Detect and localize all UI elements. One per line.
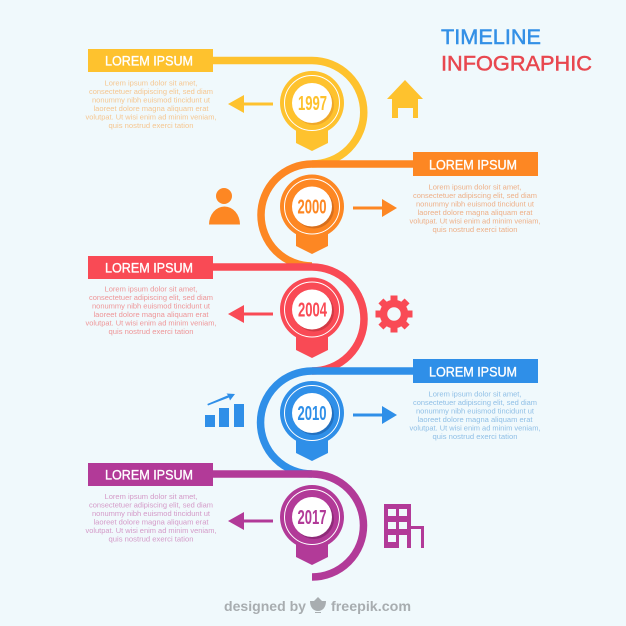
year badge [280,71,344,151]
text block: Lorem ipsum dolor sit amet, [104,284,198,294]
arrow [228,512,273,530]
icon: person [209,188,240,224]
title: INFOGRAPHIC [441,52,592,76]
heading bar [413,359,538,383]
text block: nonummy nibh euismod tincidunt ut [416,200,534,208]
icon: buildings [384,504,424,548]
heading bar [88,49,213,72]
year badge: 2010 [298,403,326,425]
text block: consectetuer adipiscing elit, sed diam [89,87,213,96]
footer credit [224,597,411,614]
panel: 2010 [205,359,540,461]
year badge [280,381,344,461]
text block: laoreet dolore magna aliquam erat [94,518,208,526]
timeline connector: blue [261,371,413,474]
timeline connector: red [213,267,364,371]
heading bar: LOREM IPSUM [429,364,517,380]
text block: laoreet dolore magna aliquam erat [418,415,532,424]
text block: nonummy nibh euismod tincidunt ut [92,509,210,518]
text block: volutpat. Ut wisi enim ad minim veniam, [410,216,540,226]
text block: Lorem ipsum dolor sit amet, [428,182,522,192]
text block: quis nostrud exerci tation [108,327,194,336]
text block [86,284,216,336]
footer credit: designed by [224,598,306,614]
year badge: 2004 [298,300,328,322]
arrow [228,305,273,323]
title: TIMELINE [441,25,541,49]
text block: nonummy nibh euismod tincidunt ut [416,406,534,416]
text block [410,182,540,234]
text block: volutpat. Ut wisi enim ad minim veniam, [86,318,216,328]
text block: Lorem ipsum dolor sit amet, [428,390,522,398]
year badge [280,278,344,358]
timeline connector: yellow [213,60,364,164]
heading bar: LOREM IPSUM [105,468,193,482]
arrow [228,95,273,113]
panel: 2000 [209,152,540,254]
text block: laoreet dolore magna aliquam erat [94,104,208,113]
heading bar [88,256,213,279]
heading bar [413,152,538,176]
heading bar [88,463,213,486]
year badge: 1997 [298,93,327,115]
heading bar: LOREM IPSUM [105,54,193,68]
text block: quis nostrud exerci tation [432,225,518,234]
heading bar: LOREM IPSUM [429,158,517,172]
year badge: 2000 [298,196,326,218]
text block: quis nostrud exerci tation [108,121,194,130]
year badge: 2017 [298,507,326,529]
text block: laoreet dolore magna aliquam erat [418,208,532,217]
text block [410,390,540,441]
text block: consectetuer adipiscing elit, sed diam [413,398,537,407]
text block: nonummy nibh euismod tincidunt ut [92,96,210,104]
icon: gear [376,296,412,332]
text block: Lorem ipsum dolor sit amet, [104,492,198,501]
arrow [353,406,397,424]
text block: volutpat. Ut wisi enim ad minim veniam, [86,112,216,122]
panel: 1997 [86,49,423,151]
text block: Lorem ipsum dolor sit amet, [104,78,198,88]
text block: volutpat. Ut wisi enim ad minim veniam, [86,526,216,535]
text block: consectetuer adipiscing elit, sed diam [89,293,213,302]
heading bar: LOREM IPSUM [105,260,193,276]
text block: consectetuer adipiscing elit, sed diam [413,191,537,200]
text block: volutpat. Ut wisi enim ad minim veniam, [410,424,540,432]
text block [86,492,216,544]
text block: quis nostrud exerci tation [432,432,518,441]
year badge [280,174,344,254]
timeline connector: orange [261,164,413,266]
panel: 2017 [86,463,424,565]
icon: house [387,80,423,118]
title [441,25,592,76]
text block: laoreet dolore magna aliquam erat [94,310,208,319]
text block: quis nostrud exerci tation [108,534,194,544]
text block [86,78,216,130]
text block: nonummy nibh euismod tincidunt ut [92,302,210,310]
year badge [280,485,344,565]
panel: 2004 [86,256,412,358]
icon: bar chart with arrow [205,394,244,427]
text block: consectetuer adipiscing elit, sed diam [89,500,213,510]
timeline connector: purple [213,474,364,577]
arrow [353,199,397,217]
footer credit: freepik.com [331,598,411,614]
